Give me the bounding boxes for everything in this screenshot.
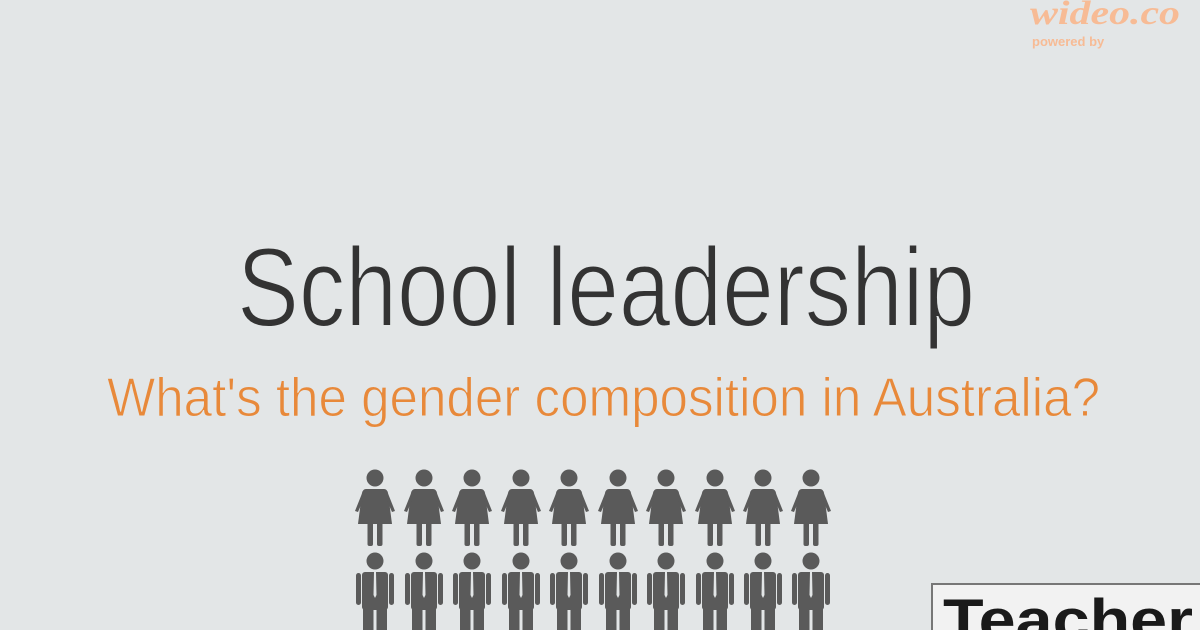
subtitle: What's the gender composition in Australia? (107, 366, 1100, 428)
pictogram: men row (356, 552, 830, 630)
pictogram: women row (355, 470, 831, 546)
logo: wideo.co powered by (1030, 0, 1180, 49)
logo: wideo.co powered by: powered by (1032, 34, 1105, 49)
title: School leadership (237, 225, 975, 350)
